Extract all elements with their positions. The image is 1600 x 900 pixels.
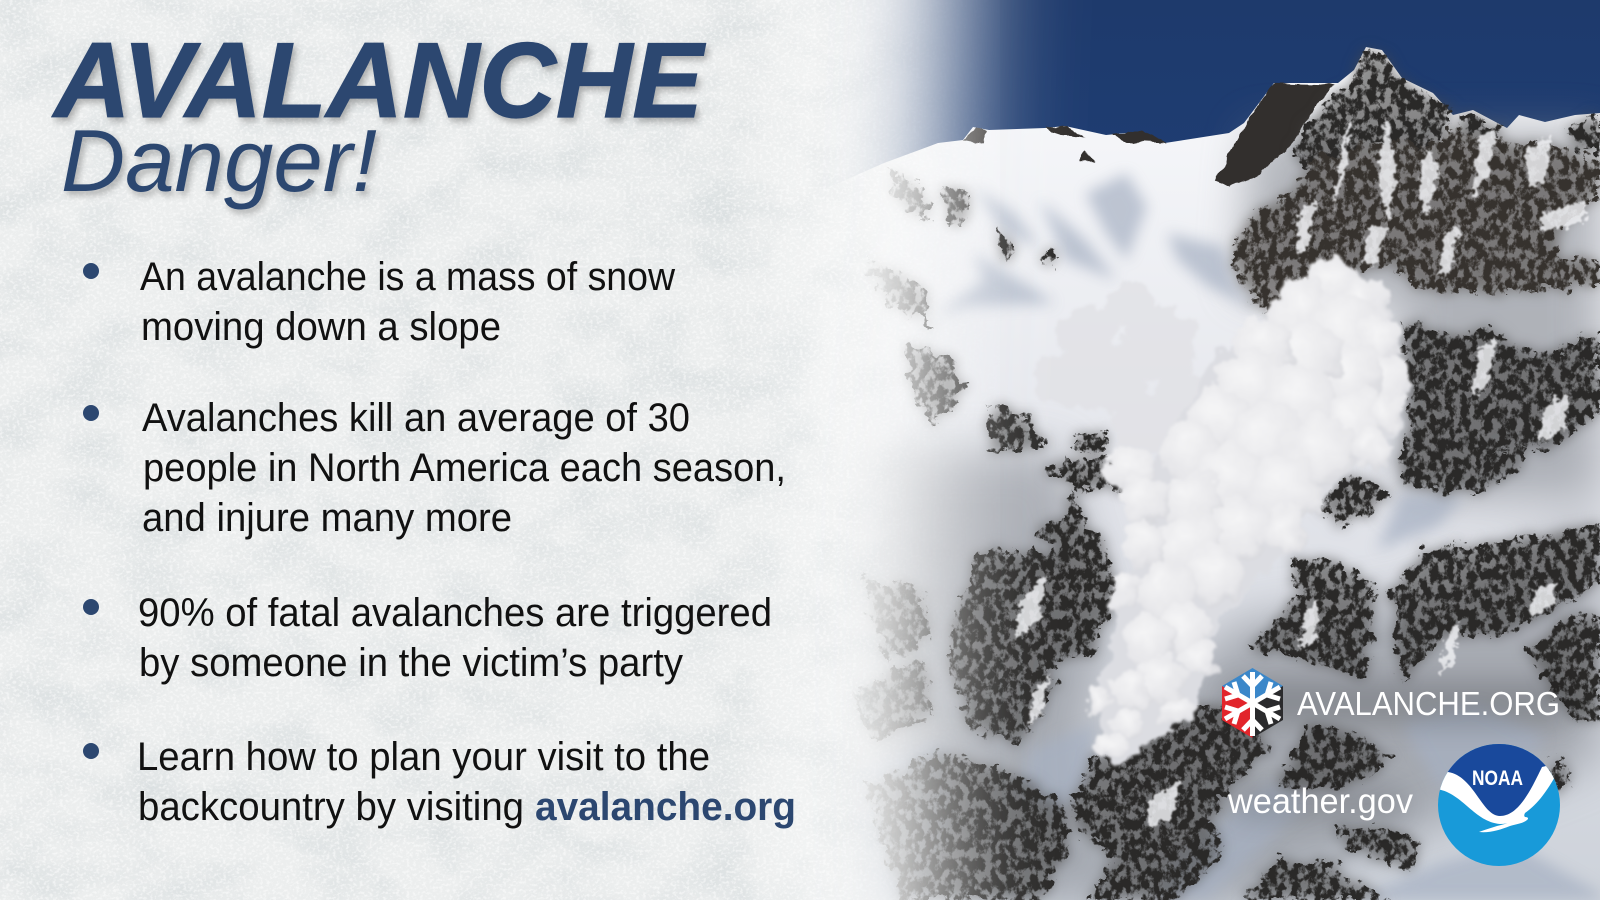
icon: snowflake hexagon [1222, 668, 1283, 738]
dark blue upper field [1448, 744, 1546, 816]
bullet 3: 90% of fatal avalanches are triggered [138, 591, 772, 635]
photo: avalanche on a mountain face, fading into the snow [800, 0, 1600, 900]
bullet 2: Avalanches kill an average of 30 [142, 396, 690, 440]
label: weather.gov: weather.gov [1227, 782, 1413, 821]
sky [853, 0, 1600, 176]
trailing haze [1036, 282, 1198, 396]
bullet 4: backcountry by visiting [138, 785, 524, 829]
rock outcrops, upper face [963, 83, 1336, 187]
logo: NOAA [1438, 744, 1560, 866]
bullet 2: people in North America each season, [143, 446, 786, 490]
NOAA wordmark: NOAA [1472, 767, 1523, 790]
logo text: AVALANCHE.ORG [1297, 685, 1560, 722]
bullet 2: and injure many more [142, 496, 512, 540]
logo: avalanche.org [1222, 668, 1570, 738]
title line: Danger!: Danger! [61, 111, 377, 210]
bullet 1: An avalanche is a mass of snow [140, 255, 675, 299]
bullet 2 [83, 396, 786, 540]
title line: AVALANCHE: AVALANCHE [51, 20, 707, 140]
bullet 3: by someone in the victim’s party [139, 641, 683, 685]
bullet list [83, 255, 796, 829]
snow veins across the rock [1015, 118, 1585, 825]
white bird swoosh [1436, 760, 1560, 832]
bullet 3 [83, 591, 772, 685]
broad grey tone of the lower rocky slopes [860, 130, 1600, 900]
bullet 4: Learn how to plan your visit to the [137, 735, 710, 779]
bullet 1 [83, 255, 675, 349]
bullet 4 [83, 735, 796, 829]
bullet 1: moving down a slope [141, 305, 501, 349]
rock mass with snow streaks [851, 47, 1600, 900]
title [51, 20, 707, 210]
bullet 4: avalanche.org [535, 785, 796, 829]
snow shadows [947, 170, 1599, 900]
avalanche powder cloud [1032, 257, 1411, 770]
snowy mountain body [800, 47, 1600, 900]
